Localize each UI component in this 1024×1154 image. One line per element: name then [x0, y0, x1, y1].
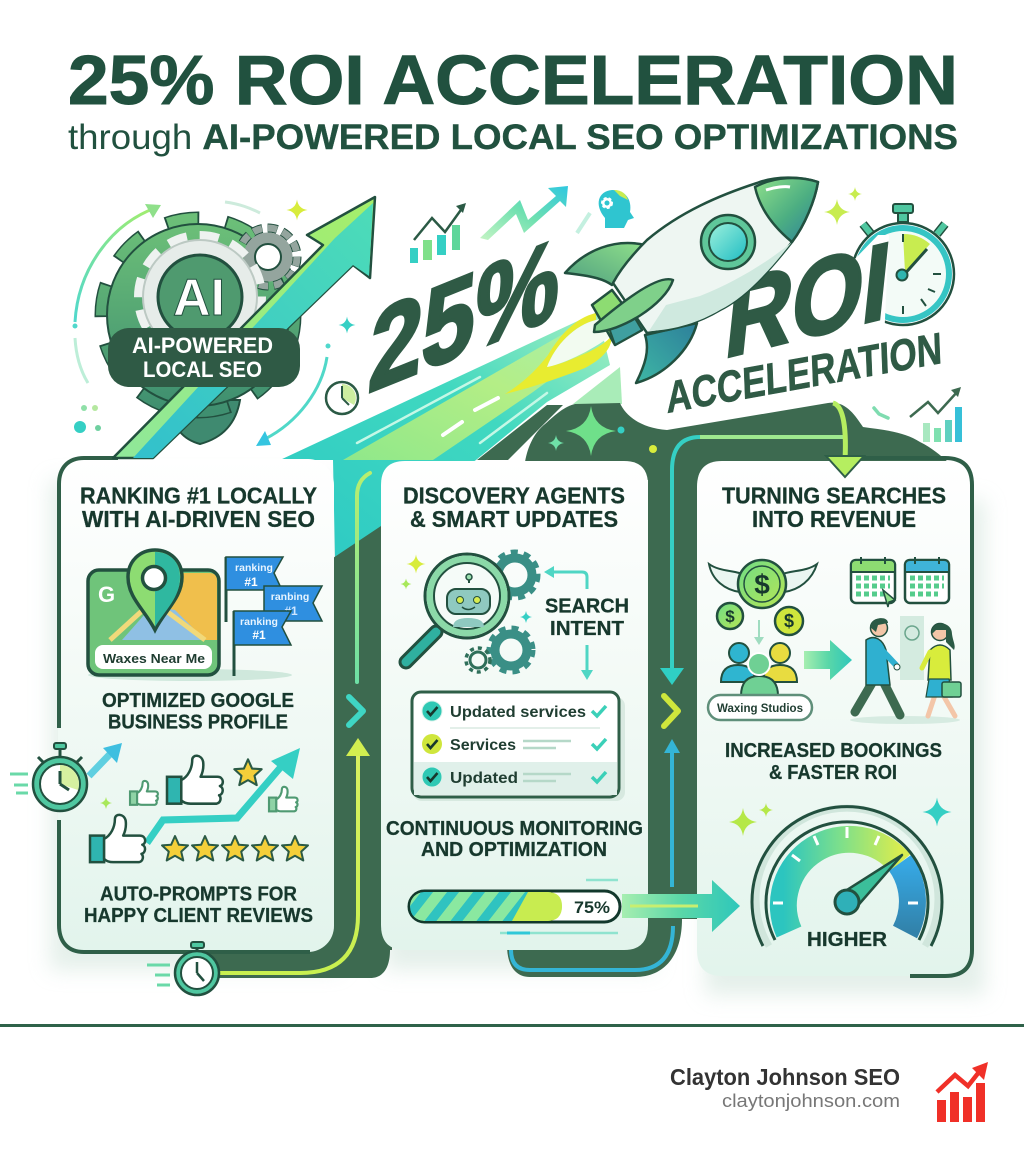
text: increased bookings: INCREASED BOOKINGS: [725, 740, 942, 762]
heading: [403, 482, 625, 532]
heading: WITH AI-DRIVEN SEO: [82, 506, 315, 532]
sparkles: [729, 798, 952, 836]
icon: google map: [88, 550, 292, 681]
big growth arrow: [113, 197, 375, 458]
connector: blue path: [511, 739, 680, 970]
text: increased bookings: & FASTER ROI: [769, 762, 897, 784]
big ROI text: ROI: [721, 218, 895, 382]
chevron: teal: [349, 697, 363, 725]
icon: winged coin: $: [725, 607, 735, 626]
icon: small bar chart: [410, 203, 466, 263]
icon: AI head: [577, 190, 634, 233]
sparkles: [400, 554, 532, 623]
arrow: [804, 640, 852, 680]
checklist: Services: [450, 737, 516, 754]
dark backdrop cloud: [525, 403, 948, 480]
panel: ranking: [58, 458, 334, 952]
connector: upper mint path: [357, 473, 370, 682]
icon: robot magnifier: [406, 552, 538, 672]
search intent with arrows: INTENT: [550, 618, 624, 640]
icon: small clock: [326, 382, 358, 414]
arrow: progress to gauge: [622, 880, 740, 932]
icon: winged coin: $: [754, 569, 770, 600]
badge: AI-powered local SEO: AI-POWERED: [132, 333, 273, 358]
heading: DISCOVERY AGENTS: [403, 482, 625, 508]
search intent with arrows: SEARCH: [545, 596, 629, 618]
icon: google map: Waxes Near Me: [103, 651, 205, 666]
icon: left stopwatch: [10, 743, 122, 811]
heading: [722, 482, 946, 532]
text: increased bookings: [725, 740, 942, 784]
icon: walking customers: [850, 616, 961, 724]
panel: discovery: [381, 461, 648, 950]
icon: rocket: [565, 178, 818, 383]
search intent with arrows: [544, 566, 629, 680]
footer brand: Clayton Johnson SEO: [670, 1064, 900, 1090]
icon: winged coin: $: [784, 611, 794, 631]
heading: [80, 482, 317, 532]
text: optimized profile: [102, 689, 294, 734]
progress bar: [409, 880, 620, 933]
text: auto prompts: [84, 882, 313, 927]
mint wedge above cloud: [573, 367, 622, 404]
icon: stopwatch large: [852, 204, 954, 325]
arrow: lime into card 3: [826, 403, 864, 477]
connector: lime path from stopwatch: [219, 752, 358, 973]
text: continuous monitoring: AND OPTIMIZATION: [421, 839, 607, 861]
checklist: Updated: [450, 770, 518, 787]
rocket exhaust trail: [280, 312, 612, 558]
icon: customers with label: Waxing Studios: [717, 701, 803, 715]
chevron: lime: [664, 696, 678, 726]
icon: ranking flags: [226, 557, 322, 676]
icon: customers with label: [708, 643, 812, 720]
checklist: [412, 692, 625, 801]
icon: AI gear cluster: AI: [173, 269, 225, 327]
badge: AI-powered local SEO: [108, 328, 300, 387]
gauge: HIGHER: [807, 929, 888, 951]
footer brand: claytonjohnson.com: [722, 1091, 900, 1111]
text: optimized profile: OPTIMIZED GOOGLE: [102, 689, 294, 712]
title: 25% ROI ACCELERATION: [68, 41, 958, 119]
icon: ranking flags: ranking: [240, 616, 278, 628]
icon: reviews growth: [90, 748, 308, 862]
footer divider: [0, 1024, 1024, 1027]
text: auto prompts: AUTO-PROMPTS FOR: [100, 882, 297, 906]
icon: right chart: [910, 387, 962, 442]
checklist: Updated services: [450, 704, 586, 721]
icon: ranking flags: #1: [244, 575, 258, 589]
icon: ranking flags: #1: [252, 628, 266, 642]
heading: TURNING SEARCHES: [722, 482, 946, 508]
icon: ranking flags: #1: [284, 604, 298, 618]
text: continuous monitoring: [386, 818, 643, 861]
outline: [59, 458, 310, 952]
icon: cloud sparkles: [548, 406, 657, 456]
text: continuous monitoring: CONTINUOUS MONITORING: [386, 818, 643, 840]
dark connector band behind cards: [205, 445, 698, 978]
icon: ranking flags: ranbing: [271, 591, 309, 603]
connector: teal path into gap: [660, 437, 845, 685]
text: optimized profile: BUSINESS PROFILE: [108, 710, 288, 734]
icon: ranking flags: ranking: [235, 562, 273, 574]
sparkles and dots: [74, 187, 888, 433]
icon: AI gear cluster: [102, 219, 297, 444]
subtitle: through AI-POWERED LOCAL SEO OPTIMIZATIONS: [68, 118, 958, 157]
dark sliver: [477, 405, 563, 460]
icon: winged coin: [709, 560, 817, 645]
footer brand: [670, 1064, 900, 1111]
gauge: [752, 807, 942, 951]
icon: google map: G: [98, 582, 115, 607]
heading: & SMART UPDATES: [410, 506, 618, 532]
card shadows: [50, 480, 985, 995]
icon: calendars: [851, 557, 949, 607]
badge: AI-powered local SEO: LOCAL SEO: [143, 357, 262, 382]
icon: bottom stopwatch: [147, 942, 219, 995]
outline: [855, 458, 972, 976]
big 25% text: 25%: [365, 212, 564, 418]
panel: revenue: [697, 458, 972, 976]
heading: INTO REVENUE: [752, 506, 916, 532]
white gap behind ROI: [846, 235, 889, 340]
arrowhead: lime up: [346, 738, 370, 756]
heading: RANKING #1 LOCALLY: [80, 482, 317, 508]
text: auto prompts: HAPPY CLIENT REVIEWS: [84, 904, 313, 927]
icon: zigzag arrow: [480, 186, 568, 240]
acceleration text: ACCELERATION: [665, 324, 943, 423]
progress bar: 75%: [574, 898, 610, 917]
decorative arcs: [72, 202, 330, 446]
icon: brand logo: [937, 1062, 988, 1122]
